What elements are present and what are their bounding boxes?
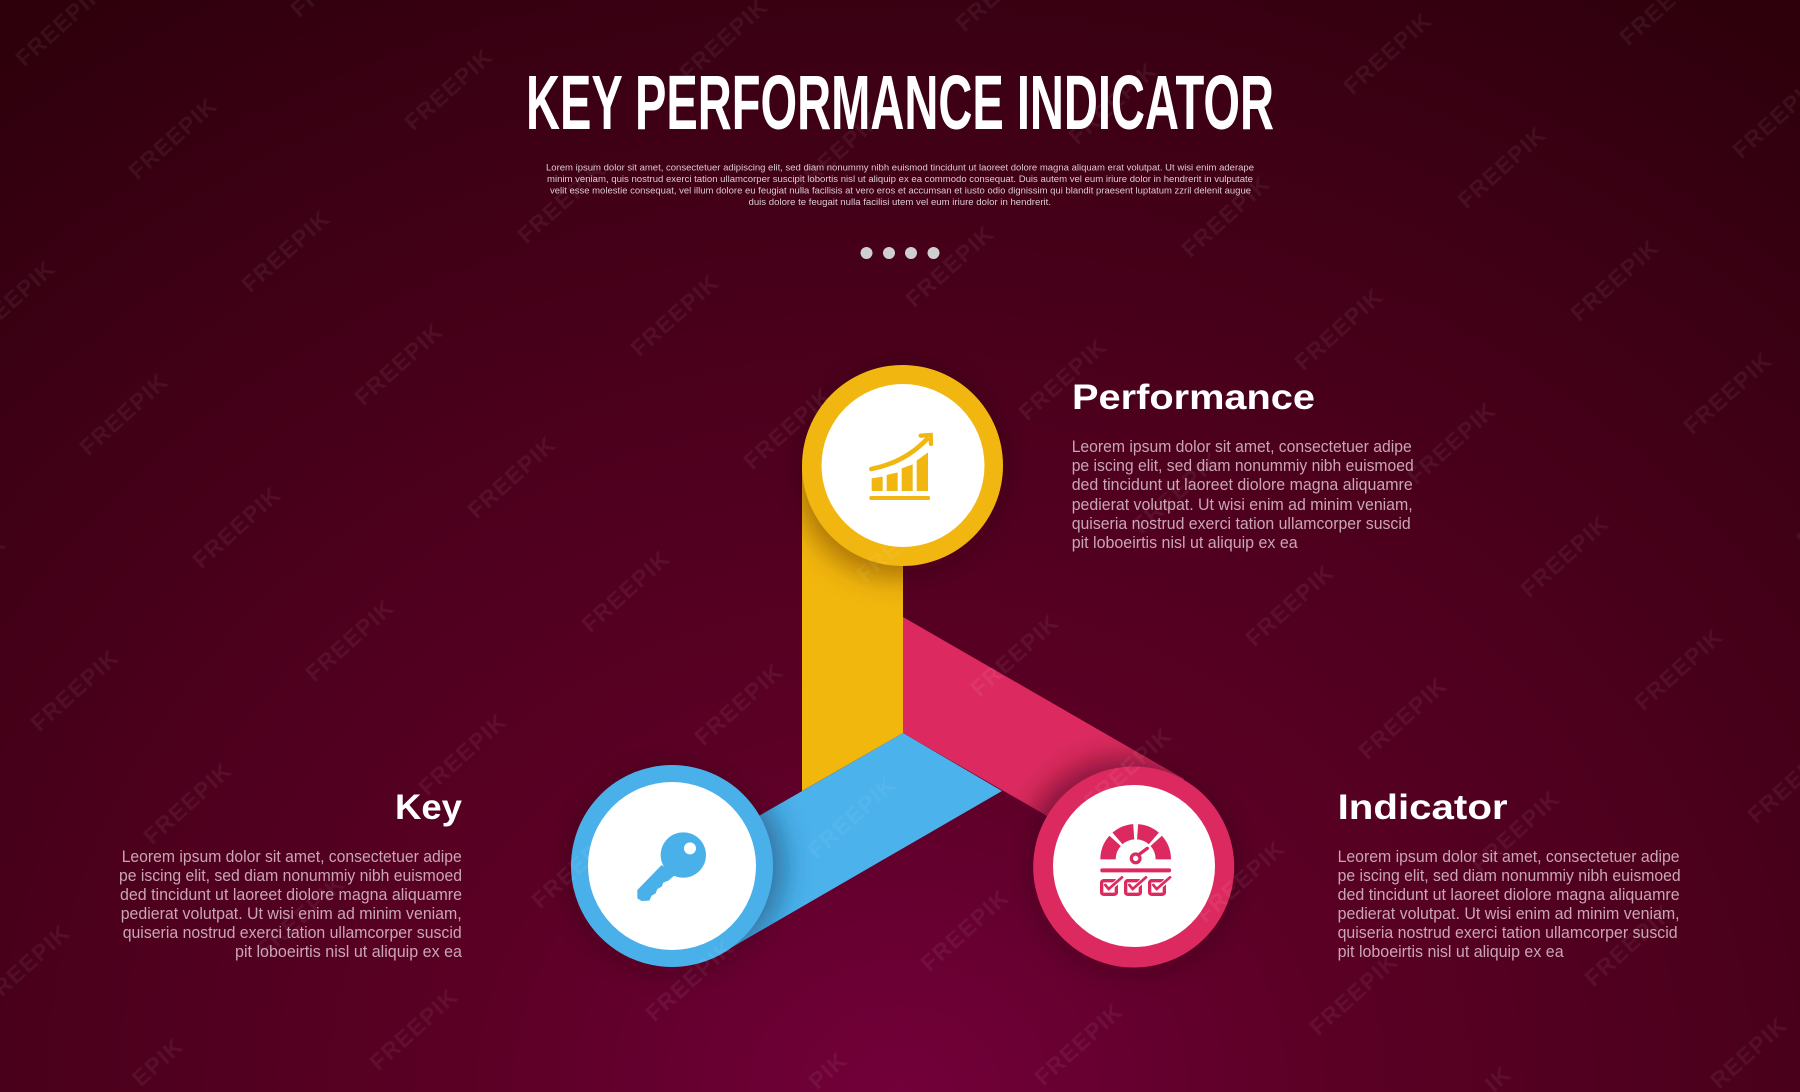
text: FREEPIK bbox=[364, 983, 463, 1075]
text: FREEPIK bbox=[512, 156, 611, 248]
heading: performance: Performance bbox=[1072, 378, 1315, 417]
body: key: pit loboeirtis nisl ut aliquip ex ea bbox=[235, 943, 463, 961]
text: FREEPIK bbox=[1579, 899, 1678, 991]
body: performance: ded tincidunt ut laoreet diolore magna aliquamre bbox=[1072, 476, 1413, 494]
text: FREEPIK bbox=[1063, 57, 1162, 149]
text: FREEPIK bbox=[1240, 559, 1339, 651]
text: FREEPIK bbox=[1176, 170, 1275, 262]
text: FREEPIK bbox=[900, 220, 999, 312]
body: performance: pe iscing elit, sed diam nonummiy nibh euismoed bbox=[1072, 457, 1414, 475]
text: FREEPIK bbox=[1304, 948, 1403, 1040]
body: key bbox=[119, 848, 463, 961]
ribbon: pink bbox=[903, 617, 1184, 816]
body: performance: Leorem ipsum dolor sit amet, consectetuer adipe bbox=[1072, 438, 1412, 456]
text: FREEPIK bbox=[576, 545, 675, 637]
text: FREEPIK bbox=[689, 658, 788, 750]
block: performance text bbox=[1072, 378, 1414, 552]
ribbon: blue bbox=[730, 733, 1002, 948]
body: key: ded tincidunt ut laoreet diolore magna aliquamre bbox=[120, 886, 462, 904]
text: FREEPIK bbox=[915, 884, 1014, 976]
text: FREEPIK bbox=[1289, 283, 1388, 375]
text: FREEPIK bbox=[462, 431, 561, 523]
node: performance circle bbox=[802, 365, 1003, 566]
text: FREEPIK bbox=[851, 495, 950, 587]
intro paragraph: Lorem ipsum dolor sit amet, consectetuer adipiscing elit, sed diam nonummy nibh euismod tincidunt ut laoreet dolore magna aliquam erat volutpat. Ut wisi enim aderape bbox=[546, 162, 1254, 174]
text: FREEPIK bbox=[1338, 7, 1437, 99]
body: key: pe iscing elit, sed diam nonummiy nibh euismoed bbox=[119, 867, 462, 885]
node: key circle bbox=[571, 765, 773, 967]
intro paragraph bbox=[546, 162, 1254, 208]
body: indicator bbox=[1338, 848, 1681, 961]
body: indicator: pedierat volutpat. Ut wisi enim ad minim veniam, bbox=[1338, 905, 1680, 923]
text: FREEPIK bbox=[640, 934, 739, 1026]
icon: growth chart bbox=[869, 435, 931, 500]
text: FREEPIK bbox=[187, 481, 286, 573]
text: FREEPIK bbox=[25, 644, 124, 736]
icon: key bbox=[637, 832, 706, 901]
text: FREEPIK bbox=[1013, 333, 1112, 425]
block: indicator text bbox=[1338, 788, 1681, 961]
pagination dots bbox=[860, 247, 940, 259]
icon: gauge and checkboxes bbox=[1100, 832, 1171, 894]
ribbon: yellow bbox=[802, 467, 903, 791]
triangular ribbon diagram bbox=[570, 365, 1236, 973]
text: FREEPIK bbox=[1029, 998, 1128, 1090]
body: indicator: pit loboeirtis nisl ut aliquip ex ea bbox=[1338, 943, 1564, 961]
heading: indicator: Indicator bbox=[1338, 788, 1508, 827]
heading: key: Key bbox=[395, 788, 463, 827]
text: FREEPIK bbox=[138, 757, 237, 849]
body: indicator: quiseria nostrud exerci tation ullamcorper suscid bbox=[1338, 924, 1678, 942]
text: FREEPIK bbox=[236, 205, 335, 297]
text: FREEPIK bbox=[1353, 672, 1452, 764]
body: key: quiseria nostrud exerci tation ullamcorper suscid bbox=[123, 924, 462, 942]
text: REEPIK bbox=[1705, 1011, 1792, 1092]
block: key text bbox=[119, 788, 463, 961]
intro paragraph: duis dolore te feugait nulla facilisi utem vel eum iriure dolor in hendrerit. bbox=[748, 197, 1051, 208]
text: FREEPIK bbox=[123, 92, 222, 184]
body: performance: pit loboeirtis nisl ut aliquip ex ea bbox=[1072, 534, 1298, 552]
body: key: pedierat volutpat. Ut wisi enim ad minim veniam, bbox=[121, 905, 462, 923]
text: FREEPIK bbox=[738, 382, 837, 474]
text: FREEPIK bbox=[1629, 623, 1728, 715]
body: key: Leorem ipsum dolor sit amet, consectetuer adipe bbox=[122, 848, 462, 866]
text: FREEPIK bbox=[413, 708, 512, 800]
text: FREEPIK bbox=[526, 821, 625, 913]
text: FREEPIK bbox=[1191, 835, 1290, 927]
text: EPIK bbox=[127, 1032, 188, 1091]
title: KEY PERFORMANCE INDICATOR bbox=[526, 60, 1274, 146]
text: FREEPIK bbox=[399, 43, 498, 135]
text: FREEPIK bbox=[1678, 347, 1777, 439]
body: performance bbox=[1072, 438, 1414, 552]
text: FREEPIK bbox=[1515, 510, 1614, 602]
text: FREEPIK bbox=[1078, 722, 1177, 814]
body: indicator: ded tincidunt ut laoreet diolore magna aliquamre bbox=[1338, 886, 1680, 904]
text: FREEPIK bbox=[625, 269, 724, 361]
body: indicator: pe iscing elit, sed diam nonummiy nibh euismoed bbox=[1338, 867, 1681, 885]
body: performance: quiseria nostrud exerci tation ullamcorper suscid bbox=[1072, 515, 1411, 533]
body: indicator: Leorem ipsum dolor sit amet, consectetuer adipe bbox=[1338, 848, 1680, 866]
ambient shadows of circles bbox=[570, 368, 1236, 973]
text: FREEPIK bbox=[251, 870, 350, 962]
text: FREEPIK bbox=[349, 318, 448, 410]
node: indicator circle bbox=[1033, 766, 1234, 968]
intro paragraph: minim veniam, quis nostrud exerci tation ullamcorper suscipit lobortis nisl ut aliquip ex ea commodo consequat. Duis autem vel eum iriure dolor in hendrerit in vulputate bbox=[547, 174, 1253, 185]
text: FREEPIK bbox=[965, 609, 1064, 701]
text: FREEPIK bbox=[1466, 785, 1565, 877]
text: FREEPIK bbox=[1127, 446, 1226, 538]
text: FREEPIK bbox=[300, 594, 399, 686]
text: FREEPIK bbox=[1565, 234, 1664, 326]
text: FREEPIK bbox=[74, 368, 173, 460]
intro paragraph: velit esse molestie consequat, vel illum dolore eu feugiat nulla facilisis at vero eros et accumsan et iusto odio dignissim qui blandit praesent luptatum zzril delenit augue bbox=[550, 186, 1251, 196]
text: FREEPIK bbox=[1452, 121, 1551, 213]
text: FREEPIK bbox=[787, 106, 886, 198]
body: performance: pedierat volutpat. Ut wisi enim ad minim veniam, bbox=[1072, 496, 1413, 514]
text: FREEPIK bbox=[1402, 397, 1501, 489]
text: FREEPIK bbox=[802, 771, 901, 863]
